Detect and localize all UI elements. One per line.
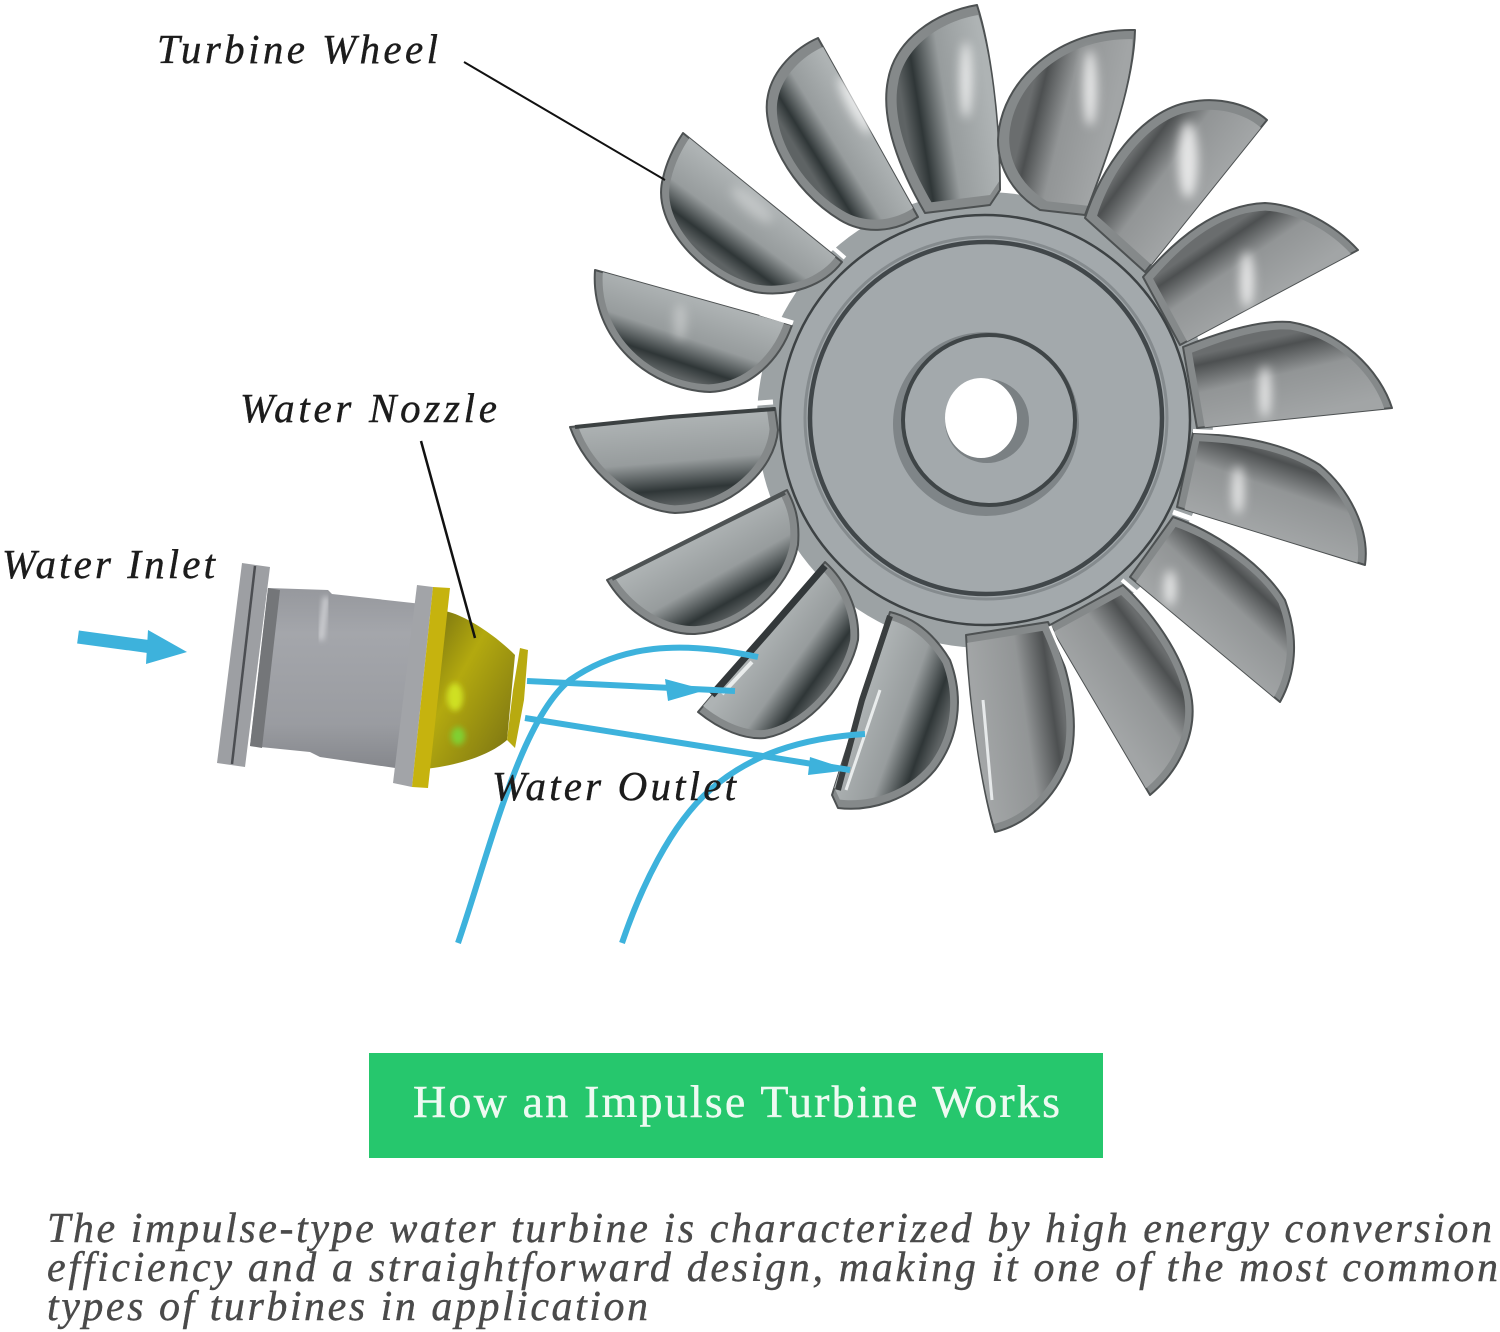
bucket 6 xyxy=(1143,203,1358,345)
outlet stream 1 xyxy=(458,648,758,943)
bucket 7 xyxy=(1183,322,1392,428)
back flange xyxy=(217,563,270,767)
title banner xyxy=(369,1053,1103,1158)
nozzle tip xyxy=(507,648,528,748)
description: The impulse-type water turbine is characterized by high energy conversion xyxy=(47,1206,1492,1252)
bucket 11 xyxy=(966,622,1074,832)
inlet arrow xyxy=(78,630,187,664)
bucket 10 xyxy=(1050,585,1193,795)
bucket: upper left, labelled xyxy=(661,133,842,293)
label: Water Nozzle: Water Nozzle xyxy=(240,385,497,431)
description: efficiency and a straightforward design, making it one of the most common xyxy=(47,1245,1498,1291)
hub hole xyxy=(945,378,1017,458)
bucket 16 xyxy=(595,270,792,392)
bucket 14 xyxy=(607,490,798,634)
bucket 2 xyxy=(767,38,918,230)
front flange xyxy=(393,585,450,788)
bucket 15 xyxy=(570,408,778,513)
bucket 8 xyxy=(1177,433,1366,565)
bucket 13 xyxy=(698,562,858,738)
bucket 4 xyxy=(998,30,1135,215)
title banner: How an Impulse Turbine Works xyxy=(413,1076,1060,1127)
label: Water Inlet: Water Inlet xyxy=(2,541,217,587)
pointer: Turbine Wheel xyxy=(464,62,665,180)
outlet stream 2 xyxy=(622,734,865,943)
nozzle assembly xyxy=(217,563,528,788)
hub xyxy=(780,215,1190,625)
water jets xyxy=(525,679,850,775)
label: Water Outlet: Water Outlet xyxy=(492,763,738,809)
description xyxy=(47,1206,1498,1330)
label: Turbine Wheel: Turbine Wheel xyxy=(157,26,438,72)
slits between buckets xyxy=(745,232,1240,668)
pipe body xyxy=(250,588,422,769)
bucket 12 xyxy=(832,612,958,809)
pointer: Water Nozzle xyxy=(421,441,475,638)
turbine wheel xyxy=(570,5,1392,832)
description: types of turbines in application xyxy=(47,1284,648,1330)
nozzle cone xyxy=(425,611,515,769)
bucket 3 xyxy=(886,5,1000,213)
bucket 9 xyxy=(1130,517,1294,702)
bucket 5 xyxy=(1085,100,1267,272)
